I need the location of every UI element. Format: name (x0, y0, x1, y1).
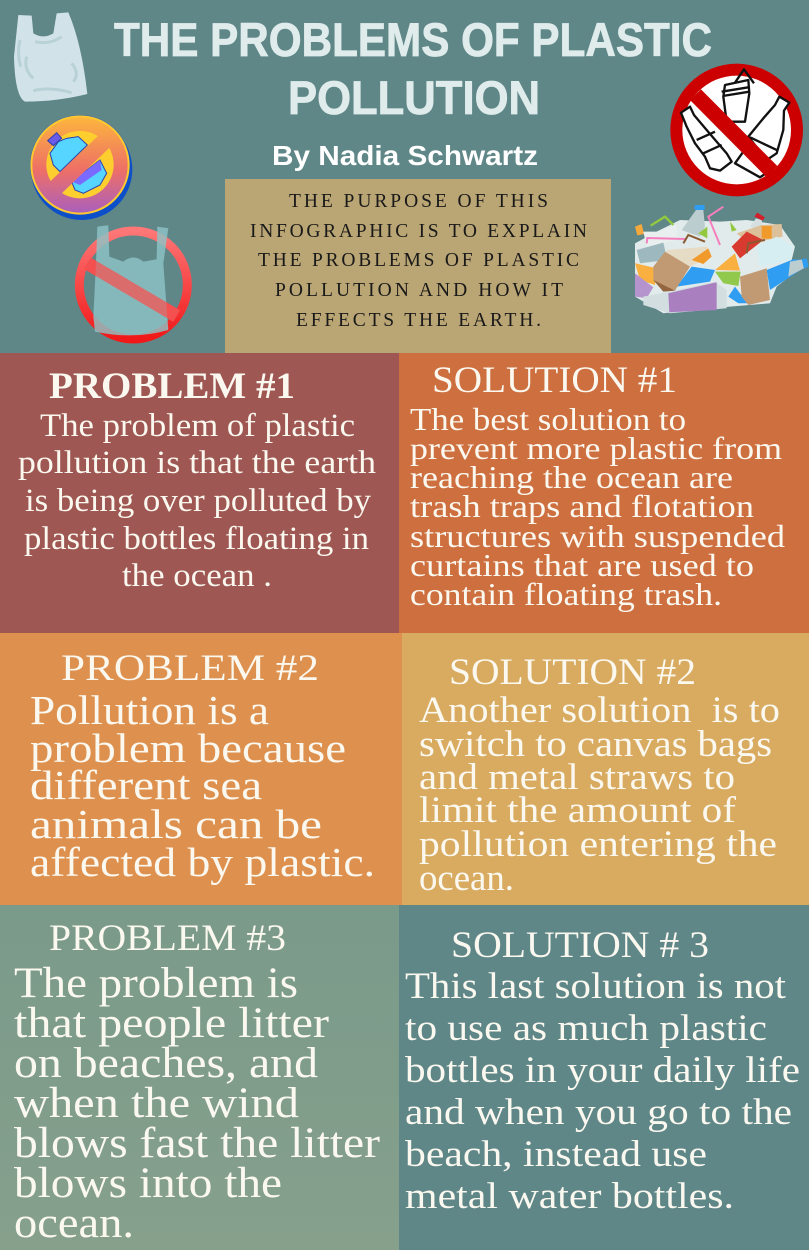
panel: solution 1: curtains that are used to (410, 547, 754, 583)
icon: no plastic bottles sign (670, 64, 803, 196)
panel: problem 3: blows fast the litter (14, 1120, 380, 1167)
icon: no plastic bag sign (79, 225, 187, 339)
purpose text box: THE PROBLEMS OF PLASTIC (258, 250, 579, 271)
panel: solution 2: SOLUTION #2 (449, 652, 696, 693)
panel: problem 3 (0, 905, 399, 1250)
panel: solution 1 (399, 353, 809, 633)
panel: solution 1: The best solution to (410, 401, 686, 437)
panel: problem 3: ocean. (14, 1200, 134, 1247)
panel: problem 3: The problem is (14, 960, 298, 1007)
panel: problem 2: Pollution is a (30, 687, 269, 733)
panel: solution 2: limit the amount of (419, 790, 737, 831)
icon: plastic bag (14, 12, 87, 102)
panel: solution 3: to use as much plastic (405, 1008, 767, 1049)
panel: solution 1: contain floating trash. (410, 576, 722, 612)
title: POLLUTION (288, 71, 540, 124)
purpose text box (225, 179, 611, 353)
panel: solution 1: structures with suspended (410, 518, 785, 554)
panel: solution 3: beach, instead use (405, 1134, 707, 1175)
panel: solution 2: pollution entering the (419, 824, 777, 865)
title: THE PROBLEMS OF PLASTIC (114, 13, 712, 66)
panel: solution 1: trash traps and flotation (410, 488, 754, 524)
panel: problem 1: the ocean . (122, 558, 272, 594)
header background (0, 0, 809, 353)
panel: solution 2: and metal straws to (419, 757, 735, 798)
panel: problem 3: that people litter (14, 1000, 329, 1047)
panel: solution 3: metal water bottles. (405, 1176, 734, 1217)
panel: problem 2: different sea (30, 762, 262, 808)
panel: problem 3: PROBLEM #3 (49, 918, 286, 959)
purpose text box: THE PURPOSE OF THIS (289, 191, 548, 212)
panel: problem 1 (0, 353, 399, 633)
panel: problem 2: animals can be (30, 801, 322, 847)
panel: problem 3: when the wind (14, 1080, 299, 1127)
icon: no water jug badge (30, 115, 132, 220)
panel: problem 3: on beaches, and (14, 1040, 318, 1087)
panel: solution 3: This last solution is not (405, 966, 787, 1007)
panel: solution 3 (399, 905, 809, 1250)
panel: problem 2 (0, 633, 402, 905)
panel: problem 2: PROBLEM #2 (61, 648, 319, 689)
title (114, 13, 712, 124)
icon: pile of plastic trash (635, 205, 809, 313)
panel: solution 3: SOLUTION # 3 (451, 925, 709, 966)
purpose text box: INFOGRAPHIC IS TO EXPLAIN (250, 221, 587, 242)
purpose text box: POLLUTION AND HOW IT (275, 280, 563, 301)
panel: solution 2: ocean. (419, 858, 514, 899)
panel: solution 1: SOLUTION #1 (432, 360, 677, 401)
panel: problem 2: problem because (30, 725, 346, 771)
byline: By Nadia Schwartz (272, 140, 538, 171)
panel: solution 2: switch to canvas bags (419, 724, 772, 765)
panel: problem 1: PROBLEM #1 (49, 366, 295, 407)
panel: problem 3: blows into the (14, 1160, 282, 1207)
panel: problem 1: pollution is that the earth (18, 445, 377, 481)
panel: solution 2: Another solution is to (419, 690, 780, 731)
panel: solution 3: bottles in your daily life (405, 1050, 800, 1091)
panel: solution 2 (402, 633, 809, 905)
panel: solution 1: reaching the ocean are (410, 459, 733, 495)
panel: solution 3: and when you go to the (405, 1092, 792, 1133)
panel: problem 1: The problem of plastic (40, 408, 355, 444)
purpose text box: EFFECTS THE EARTH. (296, 310, 541, 331)
panel: problem 2: affected by plastic. (30, 839, 375, 885)
panel: problem 1: plastic bottles floating in (24, 521, 369, 557)
panel: solution 1: prevent more plastic from (410, 430, 782, 466)
panel: problem 1: is being over polluted by (25, 483, 372, 519)
